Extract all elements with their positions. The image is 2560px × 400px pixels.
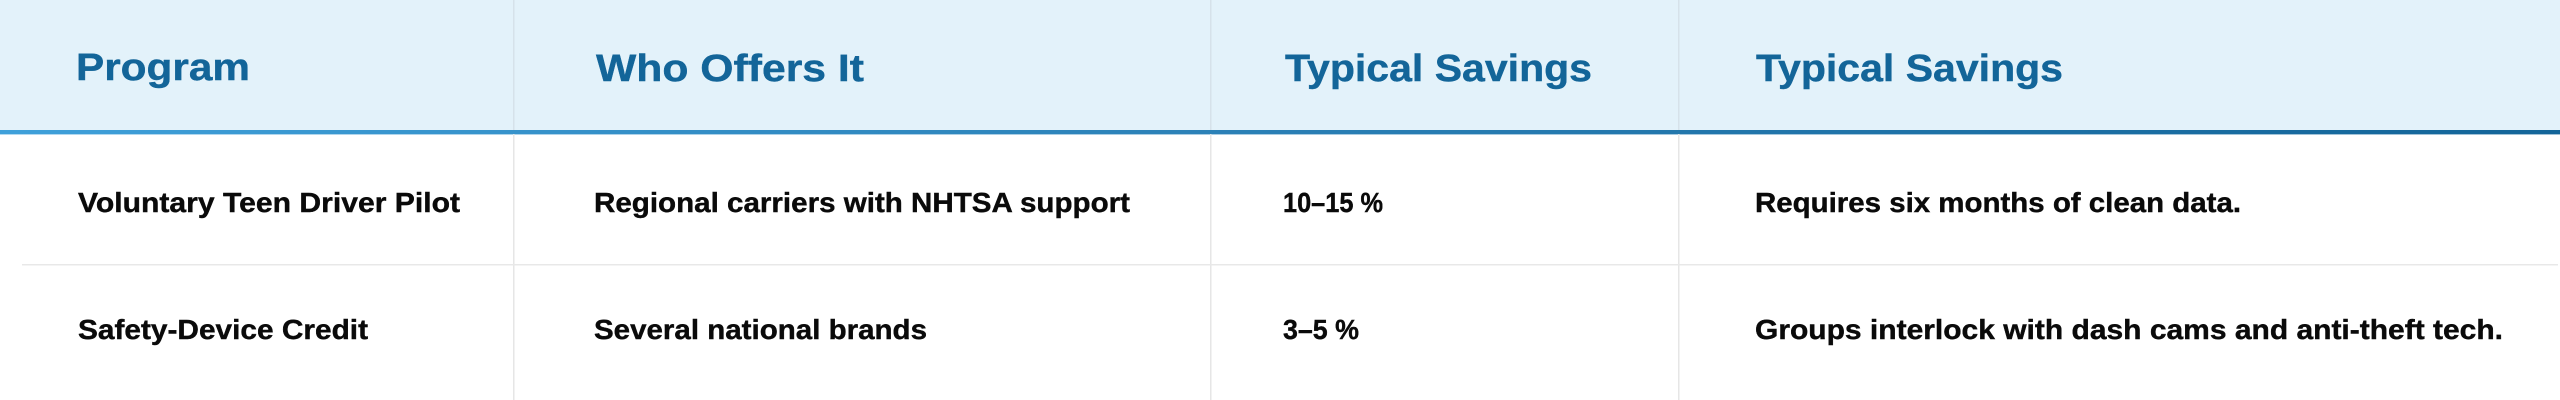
heading: Typical Savings, column 3: Typical Savings (1285, 48, 1592, 90)
header row (0, 0, 2560, 131)
cell: note: Requires six months of clean data. (1755, 187, 2241, 218)
cell: provider: Several national brands (594, 314, 927, 345)
heading: Who Offers It: Who Offers It (596, 48, 864, 90)
table row: Voluntary Teen Driver Pilot (78, 187, 2241, 218)
cell: savings: 10–15 % (1283, 187, 1383, 218)
cell: provider: Regional carriers with NHTSA support (594, 187, 1130, 218)
heading: Program: Program (76, 47, 250, 89)
header gradient rule (0, 130, 2560, 134)
cell: note: Groups interlock with dash cams and anti-theft tech. (1755, 314, 2503, 345)
cell: program name: Safety-Device Credit (78, 314, 368, 345)
table row: Safety-Device Credit (78, 314, 2503, 345)
cell: program name: Voluntary Teen Driver Pilot (78, 187, 460, 218)
heading: Typical Savings, column 4: Typical Savings (1756, 48, 2063, 90)
cell: savings: 3–5 % (1283, 314, 1359, 345)
